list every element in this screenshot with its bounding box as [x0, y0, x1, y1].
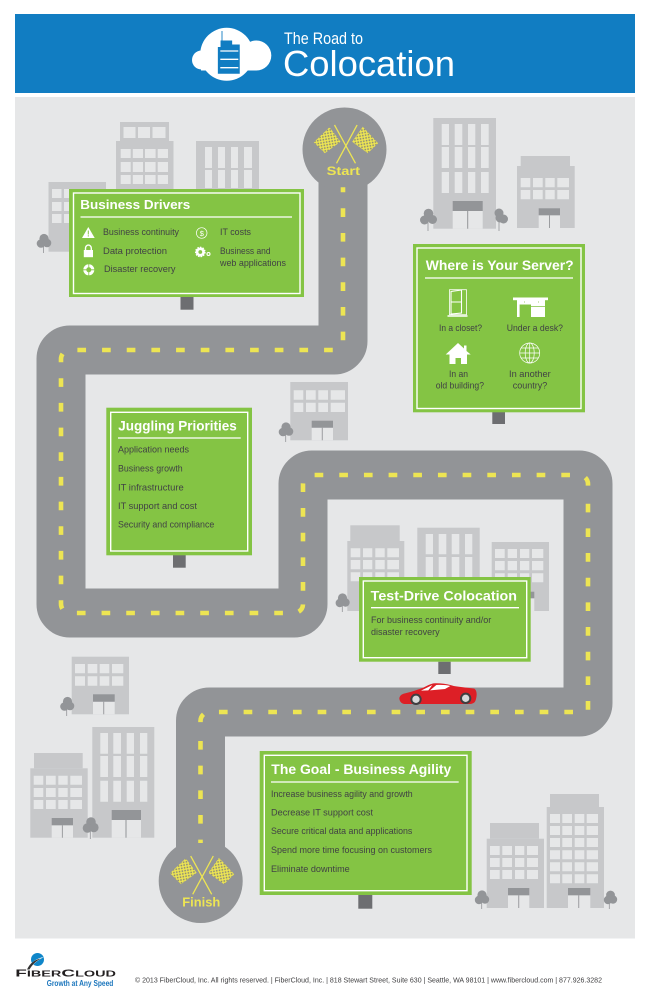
- panel: test-drive colocation: [359, 577, 531, 662]
- icon: tree: [420, 209, 437, 231]
- icon: dollar: $: [200, 229, 205, 238]
- list: Business growth: [118, 464, 183, 474]
- icon: desk: [513, 298, 548, 317]
- billboard post: where is your server: [492, 412, 505, 424]
- icon: house: [446, 343, 471, 364]
- panel: juggling priorities: [106, 408, 252, 555]
- text: data protection: Data protection: [103, 246, 167, 256]
- billboard post: juggling priorities: [173, 555, 186, 568]
- heading: Business Drivers: [80, 197, 190, 212]
- buildings: test-drive group: [336, 525, 549, 612]
- icon: red sports car: [399, 683, 477, 705]
- building: centre small: [279, 382, 348, 442]
- title: Colocation: [283, 43, 455, 84]
- road centre dashes: [61, 187, 588, 843]
- footer logo: FiberCloud: F IBER C LOUD: [15, 968, 116, 980]
- icon: tree: [475, 890, 489, 909]
- icon: tree: [83, 817, 99, 839]
- billboard post: business drivers: [180, 297, 194, 310]
- list: Increase business agility and growth: [271, 789, 413, 799]
- icon: tree: [604, 891, 617, 909]
- text: in an old building: [436, 369, 484, 391]
- heading: The Goal - Business Agility: [271, 762, 452, 777]
- icon: globe: [520, 343, 540, 363]
- label: Start: Start: [327, 164, 360, 178]
- icon: crossed checkered flags: [314, 125, 378, 163]
- icon: blue globe with swoosh: [27, 953, 44, 970]
- icon: lifebuoy: [83, 264, 94, 276]
- list: [271, 789, 432, 874]
- icon: cloud with building: [192, 28, 271, 81]
- footer logo: FiberCloud: Growth at Any Speed: [47, 979, 113, 988]
- list: Secure critical data and applications: [271, 826, 413, 836]
- text: under a desk: Under a desk?: [507, 323, 563, 333]
- list: Decrease IT support cost: [271, 807, 373, 817]
- panel: the goal: [260, 751, 472, 895]
- heading: Where is Your Server?: [426, 257, 574, 273]
- icon: crossed checkered flags: [170, 856, 234, 894]
- text: in another country: In another: [509, 369, 551, 379]
- footer contact line: © 2013 FiberCloud, Inc. All rights reserved. | FiberCloud, Inc. | 818 Stewart Street, Suite 630 | Seattle, WA 98101 | www.fibercloud.com | 877.926.3282: [135, 976, 602, 984]
- buildings: bottom right group: [475, 794, 617, 909]
- list: IT support and cost: [118, 501, 197, 511]
- text: in another country: [509, 369, 551, 391]
- icon: dollar: [196, 228, 207, 238]
- icon: door: [448, 290, 468, 316]
- panel: where is your server: [413, 244, 585, 412]
- icon: tree: [60, 697, 74, 716]
- buildings: bottom left group: [30, 657, 154, 839]
- icon: tree: [37, 234, 51, 253]
- billboard post: test-drive colocation: [438, 662, 451, 674]
- heading: Juggling Priorities: [118, 418, 237, 434]
- icon: tree: [336, 593, 350, 612]
- icon: tree: [279, 422, 293, 442]
- start marker: [302, 108, 386, 192]
- text: business and web applications: web applications: [219, 258, 286, 268]
- list: IT infrastructure: [118, 482, 184, 492]
- text: business continuity: Business continuity: [103, 227, 179, 237]
- text: in a closet: In a closet?: [439, 323, 482, 333]
- panel: business drivers: [69, 189, 304, 297]
- icon: lock: [84, 245, 93, 257]
- winding road: [61, 150, 588, 881]
- body text: For business continuity and/or: [371, 615, 491, 625]
- text: disaster recovery: Disaster recovery: [104, 264, 176, 274]
- text: business and web applications: Business and: [220, 246, 270, 256]
- text: in an old building: In an: [449, 369, 468, 379]
- icon: tree: [494, 208, 508, 231]
- list: Spend more time focusing on customers: [271, 845, 432, 855]
- icon: warning: [82, 227, 95, 238]
- body text: disaster recovery: [371, 627, 440, 637]
- text: IT costs: IT costs: [220, 227, 251, 237]
- icon: gears: [196, 247, 210, 257]
- list: Security and compliance: [118, 520, 214, 530]
- header banner: [15, 14, 635, 93]
- label: Finish: Finish: [182, 896, 220, 910]
- map background panel: [15, 97, 635, 938]
- list: Eliminate downtime: [271, 864, 350, 874]
- finish marker: [159, 839, 243, 923]
- body text: [371, 615, 491, 637]
- footer logo: FiberCloud: [15, 953, 116, 988]
- buildings: top left group: [37, 122, 259, 253]
- billboard post: the goal: [358, 895, 372, 909]
- title: The Road to: [284, 30, 363, 48]
- list: [118, 445, 214, 530]
- heading: Test-Drive Colocation: [371, 588, 517, 603]
- buildings: top right group: [420, 118, 575, 231]
- text: business and web applications: [219, 246, 286, 268]
- text: in another country: country?: [513, 381, 547, 391]
- text: in an old building: old building?: [436, 381, 484, 391]
- list: Application needs: [118, 445, 189, 455]
